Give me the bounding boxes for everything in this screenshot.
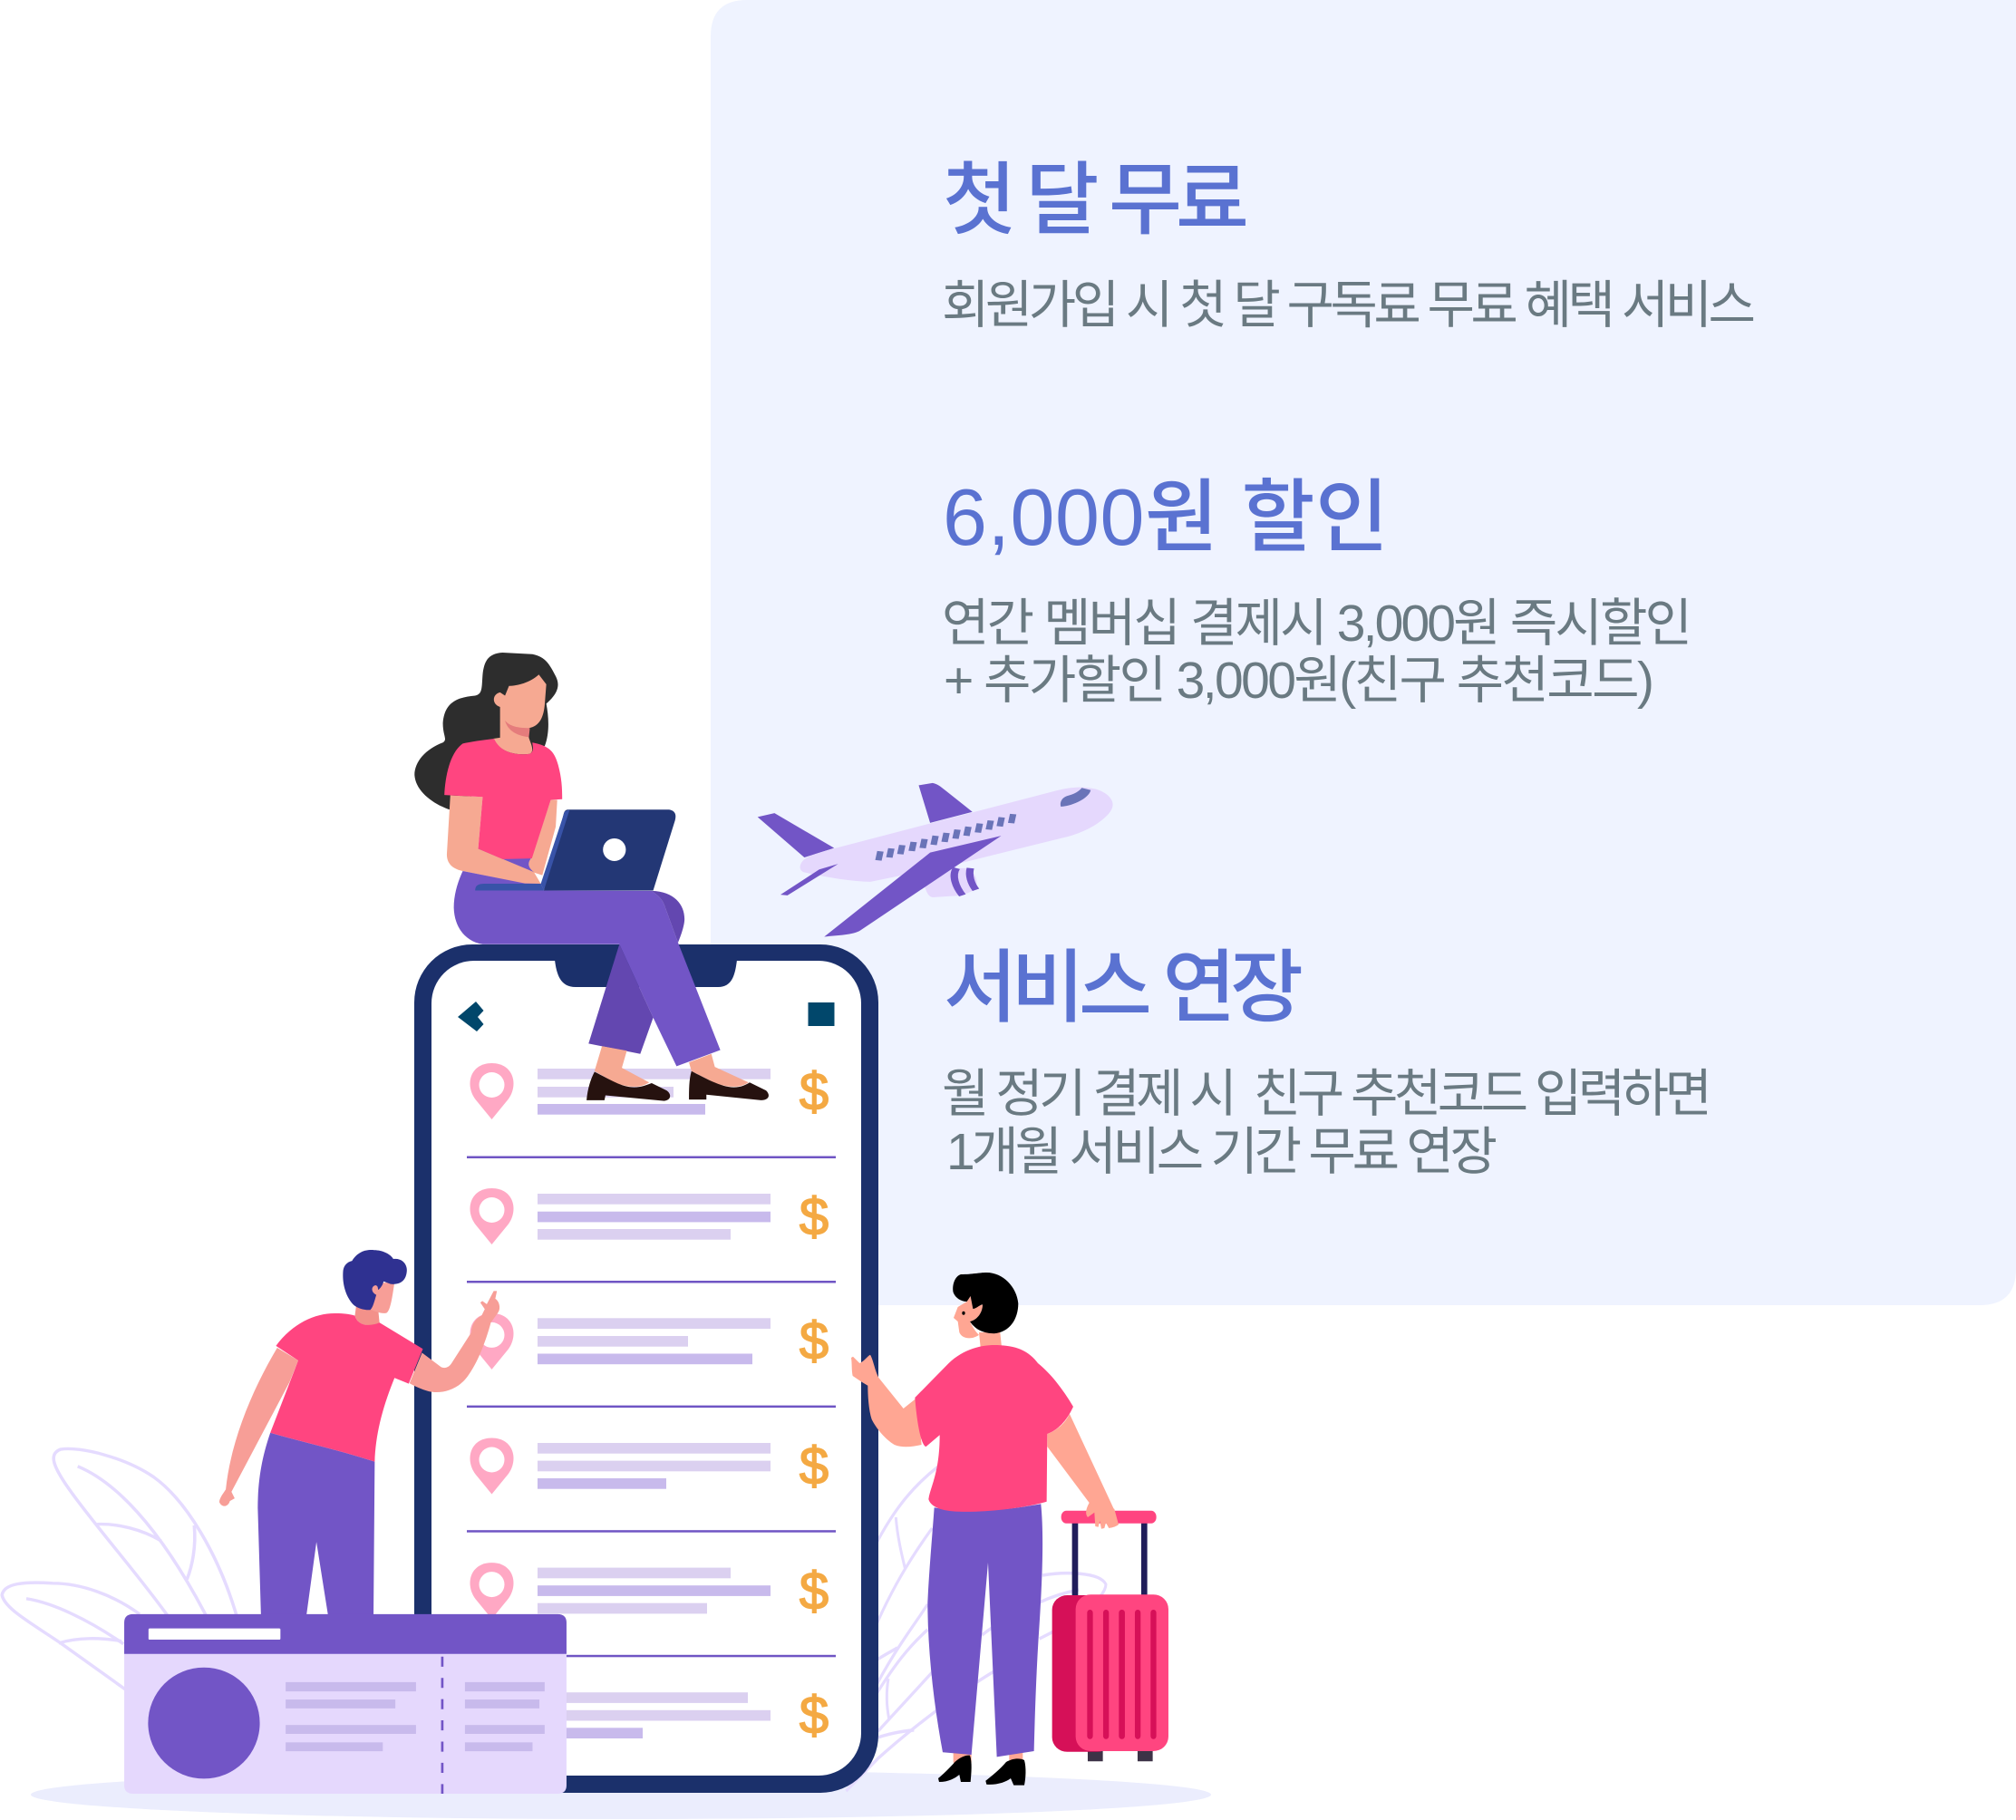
t-shirt [915, 1345, 1073, 1512]
suitcase ribs [1087, 1610, 1157, 1739]
text lines [538, 1318, 771, 1364]
ticket header [124, 1614, 567, 1654]
shirt gap [475, 847, 534, 872]
shoe right [689, 1071, 769, 1100]
ticket circle [148, 1668, 260, 1778]
decorative leaves right [846, 1467, 1106, 1791]
left arm [851, 1355, 922, 1447]
row 1 [470, 1062, 829, 1121]
ticket [124, 1614, 567, 1794]
laptop edge [541, 809, 569, 890]
ticket text lines [286, 1682, 545, 1751]
list dividers [467, 1157, 836, 1657]
decorative leaves left [2, 1448, 237, 1689]
t-shirt [270, 1313, 422, 1462]
heading: 6,000 won discount: 6,000원 할인 [943, 472, 1389, 562]
back icon [458, 1002, 484, 1031]
text lines [538, 1568, 771, 1613]
phone body [414, 944, 878, 1793]
text lines [538, 1443, 771, 1489]
suitcase side [1052, 1595, 1112, 1752]
hair [414, 653, 558, 810]
text lines [538, 1692, 771, 1738]
right arm [1047, 1414, 1119, 1525]
icon: pin [470, 1313, 513, 1370]
man pointing at phone [219, 1250, 499, 1616]
white title bar [149, 1629, 280, 1640]
text: extension description line 1: 월 정기 결제 시 친구 추천코드 입력하면 [942, 1065, 1712, 1123]
pants shaded knee [652, 891, 684, 943]
suitcase rods [1072, 1521, 1148, 1597]
pants [454, 871, 721, 1066]
face [366, 1283, 394, 1313]
row 4 [470, 1437, 829, 1496]
upper body skin arm [447, 795, 541, 884]
price icon: $ [800, 1437, 829, 1496]
row 5 [470, 1562, 829, 1621]
suitcase handle [1061, 1511, 1157, 1524]
shin right [689, 1054, 749, 1087]
neck [354, 1306, 380, 1325]
left arm [219, 1348, 298, 1506]
text: discount description line 1: 연간 멤버십 결제시 3,000원 즉시할인 [942, 595, 1692, 653]
row 6 [538, 1686, 829, 1745]
heading: first month free: 첫 달 무료 [943, 155, 1249, 245]
heading: service extension: 서비스 연장 [944, 943, 1304, 1032]
woman with suitcase [851, 1273, 1168, 1786]
neck shadow [505, 721, 530, 737]
woman sitting with laptop [414, 653, 769, 1101]
suitcase front [1076, 1594, 1168, 1751]
hair [953, 1273, 1018, 1333]
perforation [440, 1657, 445, 1794]
background panel [711, 0, 2016, 1305]
price icon: $ [800, 1187, 829, 1246]
phone [414, 944, 878, 1793]
hand on handle [1086, 1503, 1119, 1529]
neck [979, 1332, 1002, 1347]
airplane [758, 783, 1113, 937]
ankles [954, 1749, 1023, 1763]
text: extension description line 2: 1개월 서비스 기간 무료 연장 [946, 1123, 1497, 1181]
shoe left [586, 1071, 670, 1101]
price icon: $ [800, 1562, 829, 1621]
icon: pin [470, 1063, 513, 1119]
icon: pin [470, 1438, 513, 1494]
face and neck [493, 674, 547, 754]
t-shirt [444, 739, 562, 859]
suitcase wheels [1088, 1749, 1153, 1761]
suitcase [1052, 1511, 1168, 1761]
shoe right [985, 1758, 1025, 1786]
icon: pin [470, 1563, 513, 1619]
shin left [595, 1046, 649, 1087]
pants [927, 1504, 1042, 1757]
text lines [538, 1194, 771, 1240]
row 3 [470, 1312, 829, 1370]
laptop lid [544, 809, 675, 890]
icon: pin [470, 1188, 513, 1244]
menu square icon [809, 1002, 834, 1026]
text: first month description: 회원가입 시 첫 달 구독료 무료 혜택 서비스 [942, 276, 1756, 334]
pants shaded leg [588, 944, 654, 1054]
phone notch [555, 960, 737, 987]
far arm [528, 799, 557, 876]
face [954, 1296, 983, 1338]
price icon: $ [800, 1062, 829, 1121]
price icon: $ [800, 1686, 829, 1745]
laptop logo [603, 838, 625, 861]
phone screen [431, 961, 861, 1776]
eye [962, 1312, 965, 1315]
shoe left [938, 1756, 972, 1782]
text: discount description line 2: + 추가할인 3,000원(친구 추천코드) [944, 652, 1654, 710]
laptop base [475, 884, 544, 890]
pants [257, 1433, 374, 1616]
price icon: $ [800, 1312, 829, 1370]
ticket body [124, 1651, 567, 1794]
text lines [538, 1069, 771, 1115]
ground shadow [31, 1770, 1211, 1819]
right arm [410, 1291, 499, 1392]
hair [343, 1250, 407, 1310]
row 2 [470, 1187, 829, 1246]
